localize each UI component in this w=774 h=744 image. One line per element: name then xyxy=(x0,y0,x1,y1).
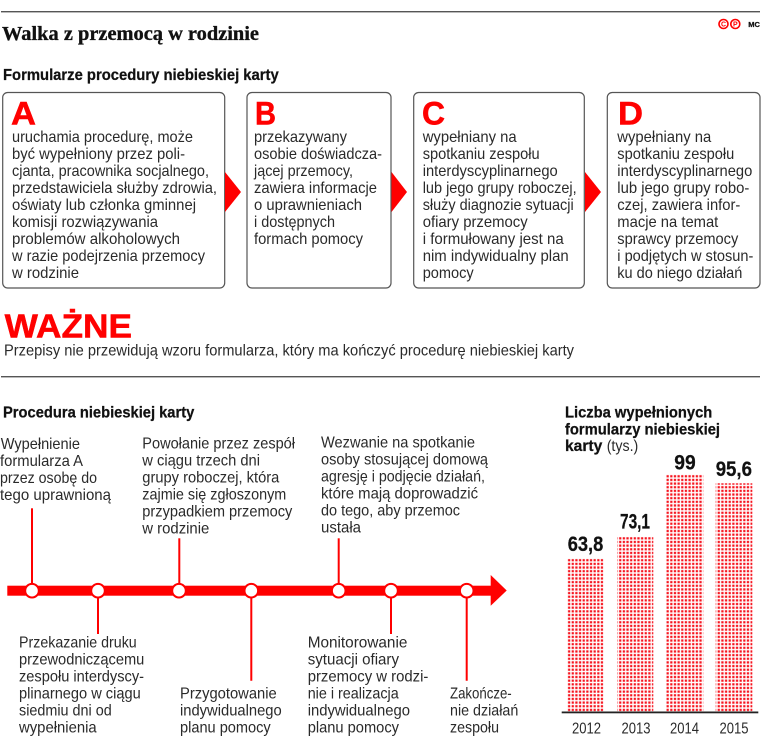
panel: form B: formach pomocy xyxy=(254,231,363,248)
timeline text: step 7 xyxy=(450,686,518,737)
timeline text: step 1 xyxy=(0,436,111,504)
timeline text: step 1: tego uprawnioną xyxy=(0,487,111,504)
timeline text: step 6: Monitorowanie xyxy=(308,634,407,651)
logo and author mark: MC xyxy=(748,22,760,29)
timeline text: step 7: zespołu xyxy=(450,720,499,737)
panel: form C: nim indywidualny plan xyxy=(423,248,569,265)
chart heading xyxy=(565,404,720,455)
bar 2012 xyxy=(567,533,604,737)
panel: form B: jącej przemocy, xyxy=(253,163,353,180)
panel: form D: ku do niego działań xyxy=(617,265,742,282)
bar 2014: 99 xyxy=(674,451,696,474)
chart heading: karty xyxy=(565,438,602,455)
panel: form C: interdyscyplinarnego xyxy=(423,163,558,180)
arrow: B to C xyxy=(392,172,407,212)
panel: form D: macje na temat xyxy=(617,214,719,231)
bar 2013 xyxy=(617,511,653,737)
section heading: forms: Formularze procedury niebieskiej karty xyxy=(3,67,279,84)
timeline text: step 5: ustała xyxy=(321,520,361,536)
panel: form C: pomocy xyxy=(423,265,474,282)
timeline text: step 5 xyxy=(321,434,488,536)
timeline text: step 5: osoby stosującej domową xyxy=(321,452,488,468)
panel: form B: o uprawnieniach xyxy=(254,197,362,214)
timeline text: step 3: zajmie się zgłoszonym xyxy=(142,486,286,503)
timeline text: step 5: które mają doprowadzić xyxy=(321,486,478,502)
callout heading: important: WAŻNE xyxy=(5,308,132,345)
panel: form D: D xyxy=(618,95,643,131)
panel: form D: spotkaniu zespołu xyxy=(617,146,734,163)
timeline text: step 6: nie i realizacja xyxy=(308,685,399,702)
timeline text: step 6 xyxy=(308,634,428,736)
panel: form A: oświaty lub członka gminnej xyxy=(12,197,196,214)
timeline text: step 3: w ciągu trzech dni xyxy=(141,452,260,469)
section heading: procedure: Procedura niebieskiej karty xyxy=(3,405,194,422)
panel: form C: spotkaniu zespołu xyxy=(423,146,540,163)
panel: form B: B xyxy=(255,95,276,131)
panel: form D: interdyscyplinarnego xyxy=(617,163,752,180)
title: Walka z przemocą w rodzinie xyxy=(2,23,259,45)
timeline text: step 6: przemocy w rodzi- xyxy=(308,668,428,685)
timeline text: step 3: grupy roboczej, która xyxy=(142,469,279,486)
logo and author mark: C xyxy=(721,22,726,28)
timeline text: step 1: przez osobę do xyxy=(0,470,97,487)
bar 2013: 73,1 xyxy=(620,511,650,534)
panel: form A: przedstawiciela służby zdrowia, xyxy=(12,180,217,197)
timeline text: step 2: wypełnienia xyxy=(18,719,97,736)
panel: form D: lub jego grupy robo- xyxy=(617,180,749,197)
bar 2013: 2013 xyxy=(622,720,651,737)
panel: form C: ofiary przemocy xyxy=(423,214,528,231)
panel: form C: i formułowany jest na xyxy=(423,231,564,248)
timeline text: step 1: formularza A xyxy=(0,453,83,470)
timeline text: step 6: indywidualnego xyxy=(308,702,410,719)
logo and author mark: P xyxy=(733,22,738,28)
timeline text: step 3: przypadkiem przemocy xyxy=(142,503,292,520)
panel: form A: być wypełniony przez poli- xyxy=(12,146,185,163)
panel: form D: i podjętych w stosun- xyxy=(617,248,753,265)
bar 2015 xyxy=(716,458,752,737)
chart heading: formularzy niebieskiej xyxy=(565,421,720,438)
panel: form A: komisji rozwiązywania xyxy=(12,214,158,231)
timeline text: step 2: Przekazanie druku xyxy=(19,634,137,651)
arrow: A to B xyxy=(225,172,241,212)
arrow: C to D xyxy=(585,172,601,212)
bar 2012: 2012 xyxy=(572,720,601,737)
timeline text: step 5: Wezwanie na spotkanie xyxy=(321,434,475,452)
timeline text: step 2: zespołu interdyscy- xyxy=(19,668,144,685)
panel: form D xyxy=(607,92,760,288)
chart heading: Liczba wypełnionych xyxy=(565,404,712,421)
timeline text: step 3: w rodzinie xyxy=(141,520,209,537)
panel: form B xyxy=(247,92,391,288)
timeline text: step 3: Powołanie przez zespół xyxy=(142,435,295,452)
panel: form A: cjanta, pracownika socjalnego, xyxy=(12,163,209,180)
panel: form A: uruchamia procedurę, może xyxy=(12,129,193,146)
timeline text: step 2 xyxy=(18,634,144,736)
panel: form B: osobie doświadcza- xyxy=(254,146,382,163)
timeline text: step 4: Przygotowanie xyxy=(180,686,277,703)
timeline text: step 5: do tego, aby przemoc xyxy=(321,502,460,520)
bar chart xyxy=(562,451,758,737)
panel: form A: w rodzinie xyxy=(11,265,79,282)
timeline text: step 6: planu pomocy xyxy=(308,719,399,736)
timeline text: step 7: Zakończe- xyxy=(450,686,512,703)
timeline text: step 4: indywidualnego xyxy=(180,703,282,720)
panel: form A: w razie podejrzenia przemocy xyxy=(11,248,205,265)
panel: form D: wypełniany na xyxy=(616,129,711,146)
panel: form C xyxy=(414,92,584,288)
panel: form B: zawiera informacje xyxy=(254,180,377,197)
panel: form A xyxy=(3,92,225,288)
timeline text: step 1: Wypełnienie xyxy=(1,436,80,453)
bar 2015: 2015 xyxy=(720,720,749,737)
bar 2014 xyxy=(666,451,703,737)
panel: form D: czej, zawiera infor- xyxy=(617,197,740,214)
bar 2012: 63,8 xyxy=(568,533,604,556)
panel: form C: C xyxy=(422,95,445,131)
timeline text: step 6: sytuacji ofiary xyxy=(308,651,399,668)
bar 2014: 2014 xyxy=(670,720,699,737)
timeline text: step 2: przewodniczącemu xyxy=(19,651,144,668)
timeline text: step 7: nie działań xyxy=(450,703,518,720)
timeline text: step 3 xyxy=(141,435,295,537)
panel: form D: sprawcy przemocy xyxy=(617,231,738,248)
timeline text: step 4 xyxy=(180,686,282,737)
timeline text: step 4: planu pomocy xyxy=(180,720,271,737)
panel: form B: i dostępnych xyxy=(254,214,335,231)
timeline text: step 2: siedmiu dni od xyxy=(19,702,112,719)
panel: form C: lub jego grupy roboczej, xyxy=(423,180,577,197)
panel: form C: wypełniany na xyxy=(422,129,517,146)
panel: form B: przekazywany xyxy=(254,129,347,146)
chart heading: (tys.) xyxy=(607,438,638,455)
timeline: arrow with markers xyxy=(7,508,507,681)
panel: form A: problemów alkoholowych xyxy=(12,231,180,248)
panel: form A: A xyxy=(11,95,36,131)
callout text: Przepisy nie przewidują wzoru formularza, który ma kończyć procedurę niebieskiej karty xyxy=(4,343,574,360)
logo and author mark xyxy=(719,20,760,29)
timeline text: step 2: plinarnego w ciągu xyxy=(19,685,141,702)
bar 2015: 95,6 xyxy=(716,458,752,481)
timeline text: step 5: agresję i podjęcie działań, xyxy=(321,468,485,486)
panel: form C: służy diagnozie sytuacji xyxy=(423,197,574,214)
